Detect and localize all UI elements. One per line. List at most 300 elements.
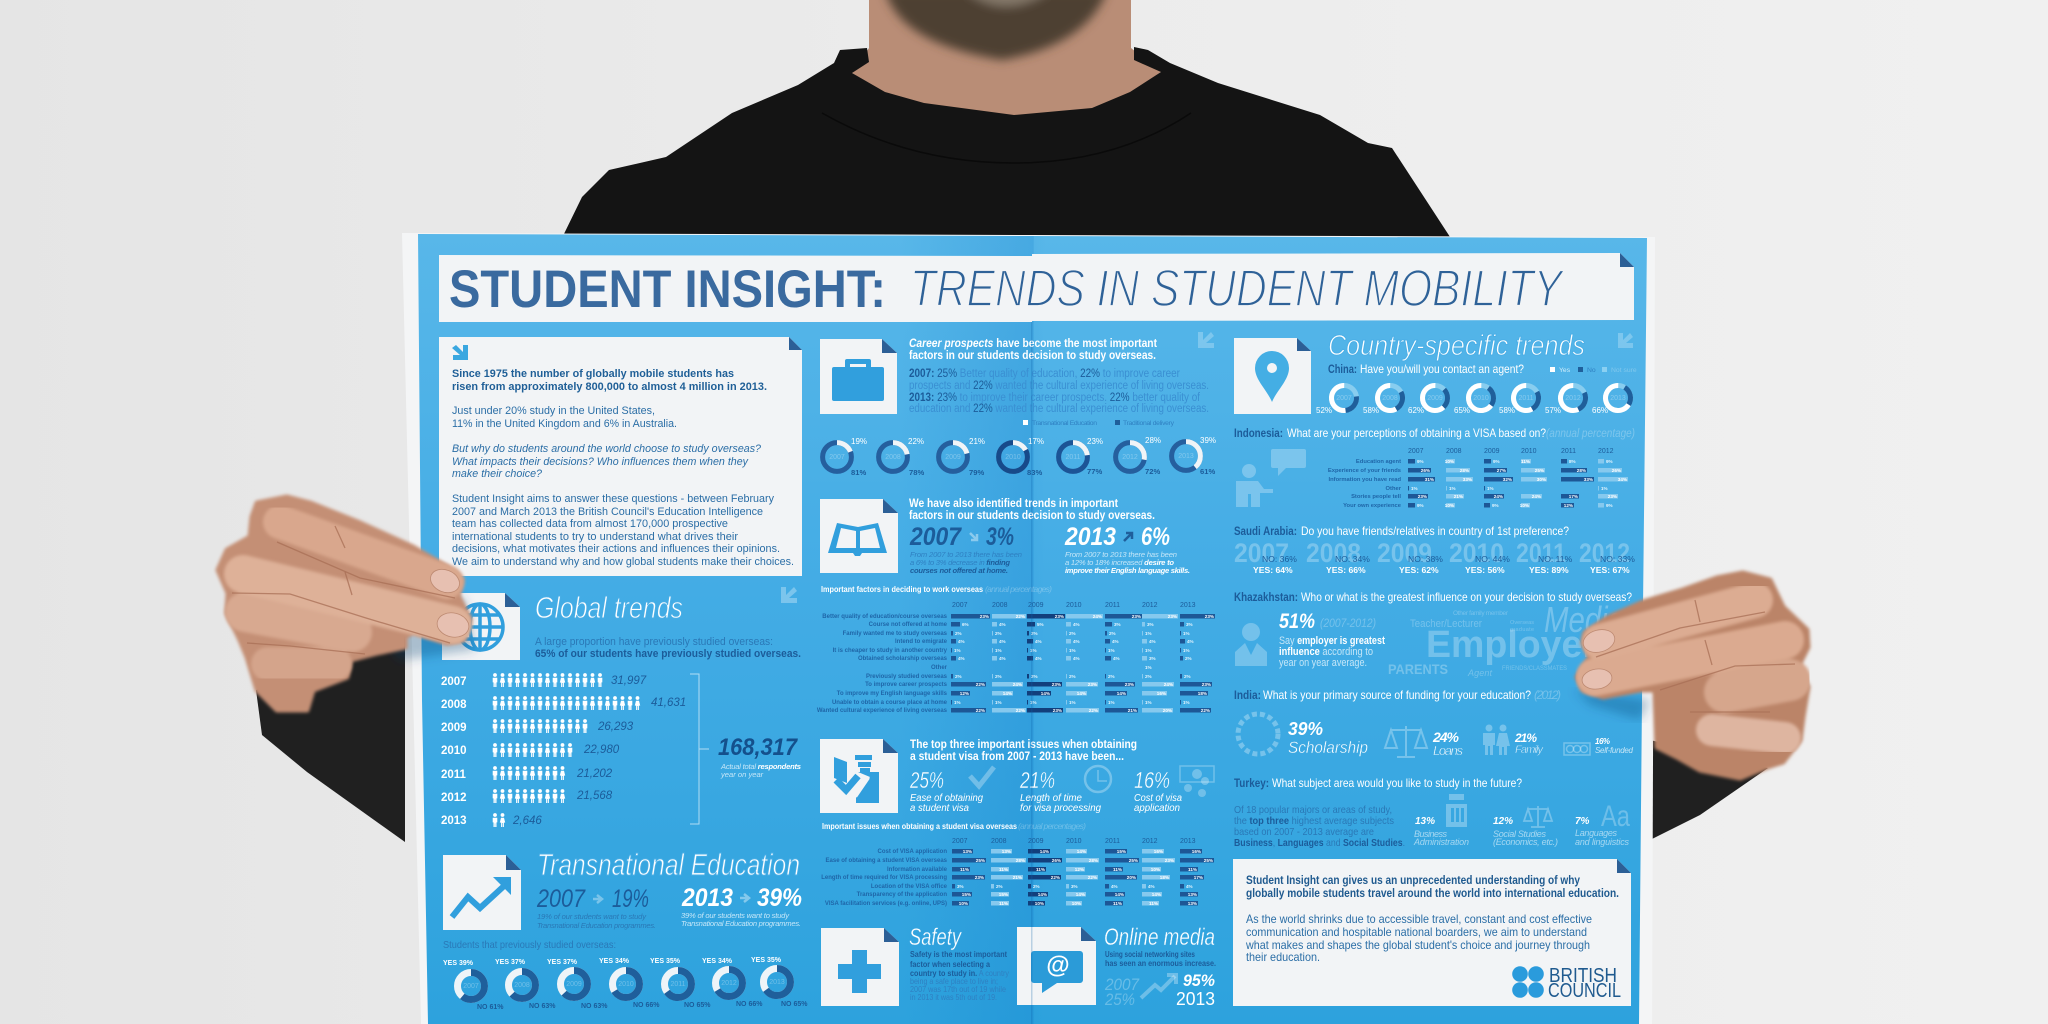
text: key fact: Since 1975 the number of globally mobile students has — [452, 368, 734, 380]
icon: clock — [1098, 770, 1107, 781]
stat: loans — [1432, 729, 1464, 758]
bars 2007: 23% — [1418, 494, 1427, 499]
text: conclusion body — [1245, 912, 1592, 964]
subject: social studies: Social Studies — [1493, 829, 1546, 839]
stat 2013 — [1064, 523, 1190, 575]
year headers — [1408, 448, 1614, 455]
bars 2007: 31% — [1425, 477, 1434, 482]
text: yearly detail: education and 22% wanted the cultural experience of living overseas. — [909, 403, 1209, 415]
bars 2008: 2% — [995, 674, 1002, 679]
row 2011: 2011 — [441, 769, 467, 781]
subject: languages — [1575, 800, 1630, 847]
bars 2012 — [1598, 459, 1628, 508]
chart: respondents per year — [441, 673, 686, 827]
bars 2012: 23% — [1608, 494, 1617, 499]
stat: 2007: 25% — [1104, 990, 1135, 1009]
ring year labels — [1336, 395, 1626, 402]
stat 2013: 39% of our students want to study — [681, 911, 790, 920]
stat 2013: 2013 — [681, 884, 733, 912]
year headers: 2010 — [1066, 602, 1082, 609]
title banner — [439, 253, 1634, 322]
bars 2007: 23% — [980, 614, 989, 619]
ring year labels: 2008 — [514, 982, 530, 989]
bars 2007: 1% — [1411, 486, 1418, 491]
ring year labels: 2007 — [1336, 395, 1352, 402]
person: sleeves — [256, 630, 1768, 842]
text: yearly detail: 2007: 25% Better quality of education, 22% to improve career — [909, 368, 1180, 380]
row 2012 — [441, 789, 613, 804]
labels no: NO 61% — [477, 1004, 504, 1011]
fingers — [243, 522, 453, 664]
row 2012: 21,568 — [576, 790, 613, 802]
yes values: YES: 56% — [1465, 565, 1505, 575]
labels yes — [443, 957, 782, 967]
bars 2012: 4% — [1148, 884, 1155, 889]
bars 2013: 3% — [1186, 622, 1193, 627]
stat: 2007 — [1104, 975, 1139, 1009]
row labels: Obtained scholarship overseas — [858, 656, 948, 662]
stat: family: Family — [1515, 744, 1544, 756]
ring year labels: 2011 — [670, 981, 686, 988]
bars 2011: 11% — [1113, 867, 1122, 872]
word cloud: influences: Agent — [1467, 668, 1492, 678]
text: safety detail — [910, 949, 1010, 1002]
text: aims: team has collected data from almost 170,000 prospective — [452, 518, 728, 530]
icon: speech bubble card — [1017, 927, 1096, 1005]
bars 2009: 4% — [1035, 639, 1042, 644]
table title: (annual percentages) — [1018, 821, 1086, 831]
question: Who or what is the greatest influence on your decision to study overseas? — [1301, 590, 1632, 604]
yes values: YES: 66% — [1326, 565, 1366, 575]
bars 2013: 11% — [1188, 867, 1197, 872]
text: safety detail: Safety is the most important — [910, 949, 1007, 959]
heading — [910, 739, 1137, 763]
text: safety detail: being a safe place to live in; — [910, 976, 998, 986]
year headers: 2013 — [1180, 838, 1196, 845]
heading: Transnational Education — [537, 847, 800, 882]
subject: social studies: 12% — [1493, 816, 1513, 827]
bars 2011: 23% — [1132, 614, 1141, 619]
question: Saudi Arabia: — [1234, 524, 1297, 538]
labels no: NO 63% — [581, 1003, 608, 1010]
china question: China: — [1328, 362, 1357, 376]
top percentages: 22% — [908, 437, 924, 446]
bars 2009: 5% — [1037, 622, 1044, 627]
bars 2007: 22% — [976, 708, 985, 713]
no values: NO: 11% — [1538, 554, 1573, 564]
bars 2007: 23% — [975, 875, 984, 880]
row 2011: 21,202 — [576, 768, 613, 780]
bars 2012: 1% — [1145, 700, 1152, 705]
bars 2010 — [1520, 459, 1547, 508]
text: conclusion lead — [1246, 873, 1619, 900]
china legend: Not sure — [1611, 367, 1637, 374]
word cloud: influences — [1388, 599, 1624, 678]
text: yearly detail — [909, 368, 1209, 415]
finger creases — [232, 526, 455, 654]
heading: We have also identified trends in important — [909, 498, 1118, 510]
china legend — [1550, 367, 1637, 374]
bars 2010: 3% — [1071, 884, 1078, 889]
bars 2010: 4% — [1073, 639, 1080, 644]
bars 2012: 20% — [1163, 708, 1172, 713]
stat: self-funded: 16% — [1595, 737, 1610, 746]
bars 2007: 10% — [959, 901, 968, 906]
row labels — [821, 849, 948, 907]
icon: briefcase card — [820, 339, 897, 414]
stat: self-funded — [1595, 737, 1634, 755]
bars 2008: 2% — [995, 631, 1002, 636]
bars 2008: 28% — [1460, 468, 1469, 473]
subject: languages: and linguistics — [1575, 837, 1630, 847]
stat: ease of obtaining: Ease of obtaining — [910, 793, 983, 804]
text: conclusion body: their education. — [1246, 950, 1320, 964]
ring year labels: 2007 — [463, 983, 479, 990]
year headers: 2011 — [1561, 448, 1576, 455]
labels yes: YES 39% — [443, 960, 474, 967]
bars 2009: 22% — [1051, 875, 1060, 880]
poster blue background — [418, 234, 1647, 1024]
word cloud: influences: PARENTS — [1388, 661, 1448, 677]
bars 2008: 33% — [1463, 477, 1472, 482]
ring year labels: 2010 — [1005, 454, 1021, 461]
question: What subject area would you like to study in the future? — [1272, 776, 1522, 790]
text: key fact: risen from approximately 800,000 to almost 4 million in 2013. — [452, 381, 767, 393]
stat 2013: Transnational Education programmes. — [681, 919, 801, 928]
word cloud: influences: Employer — [1426, 624, 1597, 666]
stat: employer: Say employer is greatest — [1279, 635, 1385, 647]
bars 2013 — [1180, 849, 1214, 906]
bottom percentages: 78% — [909, 468, 924, 477]
ring year labels — [463, 979, 785, 990]
subject: business: Administration — [1413, 837, 1469, 847]
subject: social studies: (Economics, etc.) — [1493, 837, 1558, 847]
bars 2013: 22% — [1201, 708, 1210, 713]
year headers: 2012 — [1142, 602, 1158, 609]
logo: british council: COUNCIL — [1548, 980, 1621, 1002]
bars 2009: 1% — [1487, 486, 1494, 491]
stat: length of time — [1019, 766, 1111, 814]
icon: faint arrow — [1618, 333, 1633, 348]
yes values: YES: 64% — [1253, 565, 1293, 575]
labels yes: YES 35% — [650, 958, 681, 965]
row labels: Cost of VISA application — [878, 849, 947, 855]
text: social networking: has seen an enormous increase. — [1105, 958, 1216, 968]
person: black sweater torso — [561, 47, 1452, 240]
row labels: Ease of obtaining a student VISA overseas — [826, 858, 948, 864]
stat: scholarship: 39% — [1288, 719, 1323, 739]
bars 2009: 32% — [1503, 477, 1512, 482]
row 2010: 2010 — [441, 745, 467, 757]
panel: student visa — [820, 739, 1214, 907]
bars 2013: 16% — [1192, 849, 1201, 854]
bars 2009: 1% — [1030, 700, 1037, 705]
faint years: 2007 — [1234, 538, 1289, 568]
labels no: NO 65% — [781, 1001, 808, 1008]
subject: languages: Languages — [1575, 828, 1618, 838]
bars 2013 — [1180, 614, 1215, 713]
bars 2012: 16% — [1157, 691, 1166, 696]
text: aims: decisions, what motivates their actions and influences their opinions. — [452, 543, 780, 555]
row labels: Wanted cultural experience of living overseas — [817, 708, 948, 714]
heading: Online media — [1104, 924, 1215, 951]
question: (2012) — [1534, 688, 1561, 702]
fingernails — [427, 565, 471, 640]
year headers — [952, 602, 1196, 609]
bars 2011: 1% — [1108, 648, 1115, 653]
year headers: 2013 — [1180, 602, 1196, 609]
bottom percentages: 77% — [1087, 467, 1102, 476]
text: conclusion lead: Student Insight can gives us an unprecedented understanding of why — [1246, 873, 1580, 887]
bars 2010: 12% — [1075, 867, 1084, 872]
ring year labels: 2013 — [769, 979, 785, 986]
row 2011 — [441, 766, 613, 781]
stat: cost of visa: 16% — [1134, 767, 1170, 793]
bars 2007: 4% — [958, 656, 965, 661]
bars 2012: 23% — [1168, 614, 1177, 619]
heading: a student visa from 2007 - 2013 have been... — [910, 751, 1124, 763]
stat: 2013 — [1176, 971, 1215, 1009]
row labels: Length of time required for VISA processing — [821, 875, 947, 881]
bars 2009: 2% — [1033, 884, 1040, 889]
year headers: 2007 — [952, 838, 968, 845]
bars 2011: 33% — [1584, 477, 1593, 482]
stat: 2013: 95% — [1183, 971, 1215, 990]
bars 2007: 11% — [960, 867, 969, 872]
china legend: Yes — [1559, 367, 1571, 374]
chart label: Students that previously studied overseas: — [443, 939, 616, 951]
bars 2009: 23% — [1053, 708, 1062, 713]
bars 2009: 14% — [1038, 892, 1047, 897]
bars 2010: 2% — [1069, 674, 1076, 679]
bars 2011: 20% — [1127, 875, 1136, 880]
icon: corner arrow — [452, 345, 468, 360]
bars 2011: 17% — [1569, 494, 1578, 499]
top percentages: 19% — [851, 437, 867, 446]
ring year labels: 2012 — [1122, 454, 1138, 461]
bars 2007 — [951, 614, 990, 713]
panel: conclusion — [1233, 859, 1631, 1006]
bars 2013: 2% — [1185, 656, 1192, 661]
bars 2011: 3% — [1114, 622, 1121, 627]
bars 2008: 11% — [999, 867, 1008, 872]
bars 2007 — [1408, 459, 1435, 508]
legend: Traditional delivery — [1123, 420, 1175, 427]
bars 2013: 4% — [1186, 884, 1193, 889]
poster sheet edge — [402, 233, 1655, 1024]
stat: employer: 51% — [1279, 610, 1315, 633]
bars 2013: 17% — [1194, 875, 1203, 880]
section: turkey — [1234, 776, 1630, 849]
bars 2012: 14% — [1152, 892, 1161, 897]
bars 2013: 13% — [1188, 901, 1197, 906]
bars 2010: 23% — [1088, 682, 1097, 687]
text: questions: But why do students around the world choose to study overseas? — [452, 443, 762, 455]
stat: cost of visa: application — [1134, 803, 1180, 814]
text: top subjects: Business, Languages and Social Studies. — [1234, 837, 1405, 849]
bars 2010: 2% — [1069, 631, 1076, 636]
text: questions — [452, 443, 762, 480]
text: aims: Student Insight aims to answer these questions - between February — [452, 493, 774, 505]
row labels: Unable to obtain a course place at home — [832, 700, 948, 706]
bracket — [690, 674, 709, 824]
ring year labels: 2009 — [566, 981, 582, 988]
percentages: 52% — [1316, 406, 1332, 415]
panel: career prospects — [820, 332, 1216, 477]
stat: self-funded: Self-funded — [1595, 746, 1634, 755]
bars 2011: 21% — [1128, 708, 1137, 713]
row 2008 — [441, 696, 686, 711]
text: safety detail: country to study in. A country — [910, 968, 1010, 978]
row 2012: 2012 — [441, 792, 467, 804]
subject: business — [1413, 794, 1469, 847]
stat 2013: From 2007 to 2013 there has been — [1065, 550, 1177, 559]
text: questions: make their choice? — [452, 468, 543, 480]
ring year labels: 2012 — [1565, 395, 1581, 402]
total respondents: Actual total respondents — [720, 762, 801, 771]
bar table: indonesia — [1328, 448, 1628, 509]
word cloud: influences: Other family member — [1453, 610, 1509, 617]
bars 2010: 24% — [1532, 494, 1541, 499]
subject: social studies — [1493, 806, 1558, 847]
bars 2012: 26% — [1612, 468, 1621, 473]
stat: employer: influence according to — [1279, 646, 1373, 658]
bars 2009: 14% — [1040, 849, 1049, 854]
bars 2009: 23% — [1052, 682, 1061, 687]
bars 2012 — [1142, 614, 1178, 713]
bars 2010: 11% — [1521, 459, 1530, 464]
bars 2008 — [1445, 459, 1473, 508]
total respondents: year on year — [720, 770, 764, 779]
table title: Important factors in deciding to work overseas — [821, 584, 983, 594]
bars 2007: 15% — [962, 892, 971, 897]
icon: globe card — [442, 593, 520, 660]
panel: important factors — [817, 498, 1215, 714]
heading: The top three important issues when obtaining — [910, 739, 1137, 751]
row 2013: 2013 — [441, 815, 467, 827]
bars 2011: 4% — [1112, 639, 1119, 644]
bars 2007: 9% — [1417, 459, 1424, 464]
bars 2010: 10% — [1520, 503, 1529, 508]
bars 2012: 11% — [1149, 901, 1158, 906]
year headers: 2009 — [1028, 838, 1044, 845]
row labels: Course not offered at home — [869, 622, 948, 628]
text: aims: international students to try to understand what drives their — [452, 531, 738, 543]
logo: british council — [1512, 965, 1621, 1002]
stat: employer: year on year average. — [1279, 657, 1367, 669]
row labels: To improve career prospects — [865, 682, 948, 688]
bars 2010: 14% — [1077, 849, 1086, 854]
bars 2011: 2% — [1109, 631, 1116, 636]
row labels: Previously studied overseas — [866, 674, 948, 680]
year headers: 2008 — [1446, 448, 1462, 455]
bars 2008: 4% — [999, 656, 1006, 661]
bars 2011: 4% — [1111, 884, 1118, 889]
text: key fact — [452, 368, 767, 393]
labels yes: YES 35% — [751, 957, 782, 964]
text: destinations — [452, 405, 677, 430]
bars 2007: 3% — [957, 884, 964, 889]
row labels: Information available — [887, 867, 948, 873]
year headers: 2012 — [1142, 838, 1158, 845]
heading: Career prospects have become the most important — [909, 338, 1157, 350]
bottom percentages: 81% — [851, 468, 866, 477]
icon: cross card — [821, 928, 899, 1006]
bars 2007: 22% — [976, 682, 985, 687]
bars 2009 — [1484, 459, 1513, 508]
word cloud: influences: graduate — [1510, 627, 1534, 633]
word cloud: influences: Teacher/Lecturer — [1410, 618, 1482, 630]
bars 2009: 26% — [1052, 858, 1061, 863]
bars 2010 — [1066, 614, 1103, 713]
row 2008: 41,631 — [651, 697, 686, 709]
no values: NO: 34% — [1335, 554, 1370, 564]
bars 2012: 2% — [1145, 674, 1152, 679]
bars 2009: 1% — [1030, 648, 1037, 653]
faint years: 2008 — [1306, 538, 1361, 568]
question: India: — [1234, 688, 1261, 702]
bars 2009: 4% — [1035, 656, 1042, 661]
legend — [1023, 420, 1175, 427]
bars 2007: 2% — [955, 674, 962, 679]
icon: money — [1180, 766, 1214, 797]
labels no — [477, 1001, 808, 1011]
bars 2008: 1% — [995, 700, 1002, 705]
bars 2013: 23% — [1205, 614, 1214, 619]
hand: right — [1575, 573, 1808, 778]
bars 2012: 9% — [1606, 459, 1613, 464]
labels yes: YES 37% — [547, 959, 578, 966]
stat: ease of obtaining: a student visa — [910, 803, 969, 814]
bars 2009: 9% — [1493, 459, 1500, 464]
poster centre fold shading — [900, 236, 1045, 1024]
icon: scales — [1385, 726, 1427, 757]
ring year labels: 2007 — [829, 454, 845, 461]
stat 2013: 6% — [1141, 523, 1170, 551]
top percentages: 17% — [1028, 437, 1044, 446]
subject: business: 13% — [1415, 816, 1435, 827]
bars 2011: 23% — [1125, 682, 1134, 687]
faint years: 2009 — [1377, 538, 1432, 568]
bars 2011: 1% — [1108, 700, 1115, 705]
bars 2009: 11% — [1036, 867, 1045, 872]
ring year labels: 2013 — [1178, 453, 1194, 460]
bars 2012: 23% — [1165, 858, 1174, 863]
bars 2008: 13% — [1002, 849, 1011, 854]
heading: Safety — [909, 924, 963, 951]
faint years: 2012 — [1579, 538, 1630, 568]
question: What is your primary source of funding for your education? — [1263, 688, 1531, 702]
year headers — [952, 838, 1196, 845]
table title: Important issues when obtaining a student visa overseas — [822, 821, 1017, 831]
yes values: YES: 67% — [1590, 565, 1630, 575]
finger creases — [1596, 600, 1795, 712]
bars 2013: 1% — [1183, 648, 1190, 653]
top percentages — [851, 436, 1216, 446]
bars 2012: 18% — [1160, 875, 1169, 880]
top percentages: 21% — [969, 437, 985, 446]
stat: loans: Loans — [1433, 743, 1464, 758]
icon: visa officer card — [820, 739, 898, 813]
total respondents — [718, 734, 801, 779]
hand: left — [218, 497, 475, 710]
text: top subjects: based on 2007 - 2013 average are — [1234, 826, 1374, 838]
bars 2011: 28% — [1577, 468, 1586, 473]
question: Indonesia: — [1234, 426, 1283, 440]
percentages: 62% — [1408, 406, 1424, 415]
stat: scholarship — [1288, 719, 1368, 757]
row labels: Intend to emigrate — [895, 639, 948, 645]
